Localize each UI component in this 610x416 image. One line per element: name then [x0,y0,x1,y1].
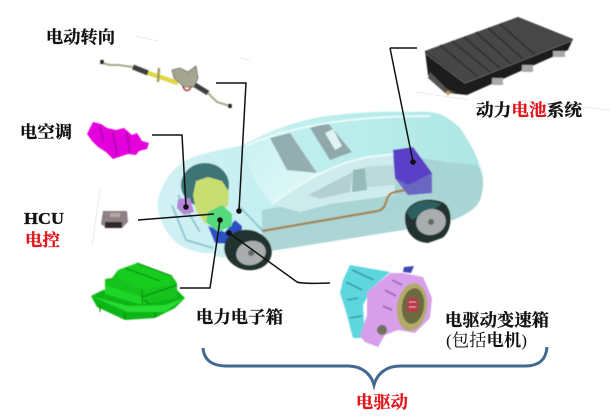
body highlights [246,116,430,204]
car lower side [262,155,483,252]
label: electric air conditioning: 电空调 [20,122,72,142]
top block [118,263,172,290]
middle block [105,270,177,305]
engine yellow [193,177,229,224]
front interior [270,133,317,173]
label: HCU electronic control: HCU [24,209,64,228]
leader lines [138,48,417,288]
icon: AC compressor [87,122,149,159]
icon: steering rack [102,60,230,108]
leader: drive unit [229,233,330,283]
car [157,112,483,276]
rear wheel [405,200,451,243]
windshield [243,128,322,203]
brace [203,347,547,385]
rear side window [365,165,397,187]
label: electric steering: 电动转向 [46,27,115,47]
icon: power electronics box [91,263,185,320]
label: HCU electronic control: 电控 [25,230,60,250]
base [91,290,185,320]
side glass [270,155,395,212]
leader: air conditioning [152,135,186,207]
door pillar [352,168,367,192]
label: electric drive transmission [445,310,549,350]
leader: steering [216,83,246,211]
green power box [206,205,232,232]
icon: battery pack [425,17,573,95]
label: electric drive: 电驱动 [356,392,408,412]
label: electric drive transmission: 电驱动变速箱 [445,310,549,330]
front wheel [220,224,276,276]
blue drive unit [208,220,242,244]
cable [262,190,407,231]
label: HCU electronic control [24,209,64,250]
icon: HCU module [101,211,128,228]
leader: battery [390,48,417,162]
purple AC unit in car [177,198,194,215]
car body [157,112,483,257]
leader: HCU [138,214,214,220]
label: electric drive transmission: (包括电机) [446,331,527,350]
rear interior [310,122,352,160]
label: power electronics box: 电力电子箱 [196,308,283,327]
leader dots [183,159,416,236]
leader: power electronics [180,220,220,288]
icon: drive transmission [340,265,432,347]
front frame [172,195,264,248]
faint background strokes [92,36,610,246]
front side window [308,172,353,199]
battery in car [393,147,432,195]
front wheel arch [181,163,229,207]
label: power battery system: 动力电池系统 [476,100,583,120]
